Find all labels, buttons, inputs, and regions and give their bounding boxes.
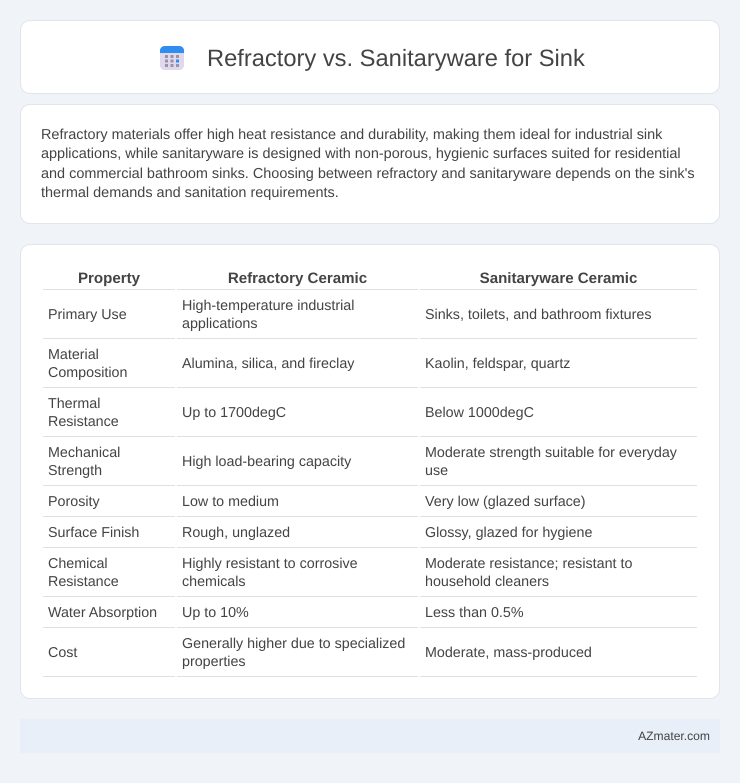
title card (20, 20, 720, 94)
comparison table: Up to 1700degC (182, 405, 286, 421)
intro text: applications, while sanitaryware is designed with non-porous, hygienic surfaces suited for residential (41, 146, 681, 162)
comparison table: Moderate strength suitable for everyday (425, 445, 677, 461)
icon: calendar (160, 46, 184, 70)
comparison table: Highly resistant to corrosive (182, 556, 358, 572)
footer bar (20, 719, 720, 753)
comparison table: household cleaners (425, 574, 549, 590)
comparison table: chemicals (182, 574, 246, 590)
comparison table: applications (182, 316, 258, 332)
intro text (41, 127, 695, 201)
comparison table: Moderate resistance; resistant to (425, 556, 632, 572)
comparison table: Kaolin, feldspar, quartz (425, 356, 570, 372)
comparison table: Rough, unglazed (182, 525, 290, 541)
comparison table: Below 1000degC (425, 405, 534, 421)
comparison table (43, 270, 697, 677)
table card (20, 244, 720, 699)
comparison table: Alumina, silica, and fireclay (182, 356, 354, 372)
comparison table: Chemical (48, 556, 108, 572)
footer bar: AZmater.com (638, 729, 710, 743)
comparison table: Strength (48, 463, 102, 479)
comparison table: Low to medium (182, 494, 279, 510)
intro card (20, 104, 720, 224)
comparison table: Refractory Ceramic (228, 270, 367, 287)
comparison table: Surface Finish (48, 525, 139, 541)
comparison table: Sanitaryware Ceramic (480, 270, 637, 287)
comparison table: Glossy, glazed for hygiene (425, 525, 592, 541)
comparison table: Material (48, 347, 99, 363)
comparison table: Up to 10% (182, 605, 249, 621)
comparison table: High load-bearing capacity (182, 454, 351, 470)
intro text: Refractory materials offer high heat resistance and durability, making them ideal for industrial sink (41, 127, 662, 143)
comparison table: Thermal (48, 396, 100, 412)
comparison table: Resistance (48, 574, 119, 590)
comparison table: Less than 0.5% (425, 605, 524, 621)
comparison table: Cost (48, 645, 77, 661)
comparison table: Porosity (48, 494, 100, 510)
intro text: thermal demands and sanitation requirements. (41, 185, 339, 201)
comparison table: Sinks, toilets, and bathroom fixtures (425, 307, 651, 323)
comparison table: Primary Use (48, 307, 127, 323)
comparison table: Resistance (48, 414, 119, 430)
comparison table: use (425, 463, 448, 479)
comparison table: properties (182, 654, 246, 670)
comparison table: Generally higher due to specialized (182, 636, 405, 652)
comparison table: Mechanical (48, 445, 120, 461)
comparison table: Moderate, mass-produced (425, 645, 592, 661)
intro text: and commercial bathroom sinks. Choosing between refractory and sanitaryware depends on the sink's (41, 166, 695, 182)
comparison table: Composition (48, 365, 127, 381)
comparison table: Property (78, 270, 140, 287)
title: Refractory vs. Sanitaryware for Sink (207, 46, 585, 72)
comparison table: Water Absorption (48, 605, 157, 621)
comparison table: Very low (glazed surface) (425, 494, 586, 510)
comparison table: High-temperature industrial (182, 298, 354, 314)
